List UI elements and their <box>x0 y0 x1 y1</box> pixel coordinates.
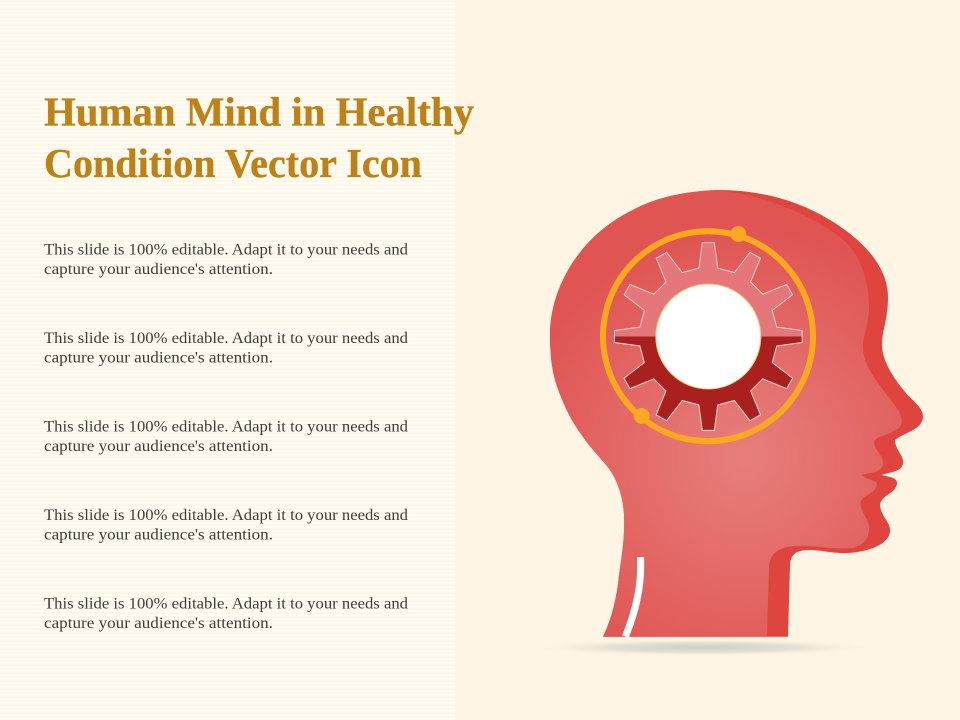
title <box>44 88 474 186</box>
text block 1 <box>44 242 408 278</box>
text block 3 <box>44 418 408 455</box>
gear <box>614 243 802 430</box>
ring dot top <box>730 226 746 242</box>
head outer silhouette <box>550 190 923 637</box>
panel: striped left column <box>0 0 455 720</box>
text block 3: This slide is 100% editable. Adapt it to your needs and <box>44 418 408 436</box>
gear light body <box>614 243 802 430</box>
ground shadow <box>529 638 877 656</box>
neck highlight stripe <box>626 557 641 636</box>
text block 3: capture your audience's attention. <box>44 438 273 455</box>
gear dark lower half <box>614 336 803 431</box>
text block 2: This slide is 100% editable. Adapt it to your needs and <box>44 330 408 347</box>
text block 5 <box>44 596 408 632</box>
text block 5: capture your audience's attention. <box>44 615 273 632</box>
text block 4: capture your audience's attention. <box>44 526 273 544</box>
text block 1: This slide is 100% editable. Adapt it to your needs and <box>44 242 408 258</box>
text block 4: This slide is 100% editable. Adapt it to your needs and <box>44 507 408 524</box>
text block 5: This slide is 100% editable. Adapt it to your needs and <box>44 596 408 612</box>
icon: human head with gear <box>550 190 923 637</box>
gear centre hole <box>656 284 761 389</box>
text block 4 <box>44 507 408 544</box>
text block 2 <box>44 330 408 366</box>
text block 2: capture your audience's attention. <box>44 350 273 366</box>
orange ring <box>603 231 813 441</box>
ring dot bottom <box>634 408 650 424</box>
head inner gradient face <box>550 190 902 637</box>
title: Condition Vector Icon <box>44 140 422 186</box>
text block 1: capture your audience's attention. <box>44 261 273 278</box>
title: Human Mind in Healthy <box>44 88 474 134</box>
